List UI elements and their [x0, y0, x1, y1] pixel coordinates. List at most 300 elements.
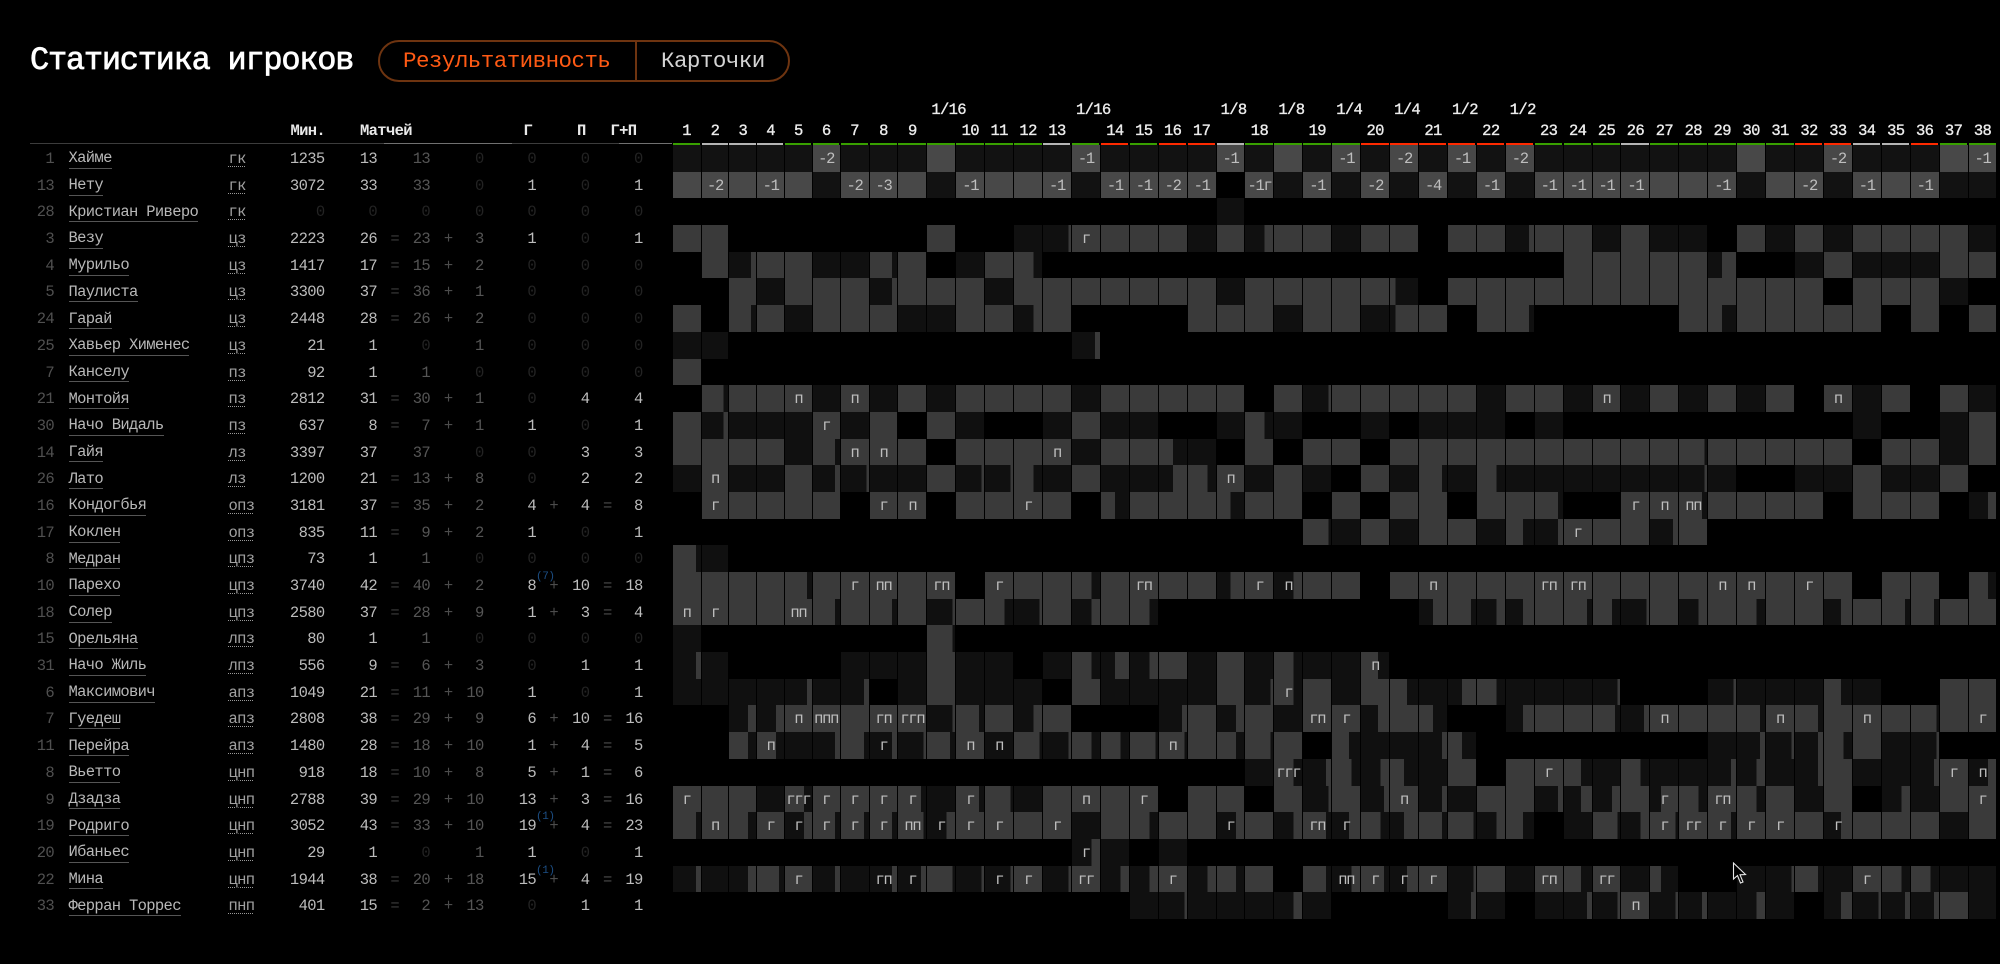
row: Мина: + — [549, 871, 558, 889]
row: Максимович: Максимович — [68, 683, 155, 701]
heatmap row: Парехо: гп — [1541, 577, 1557, 595]
heatmap row: Родриго: г — [937, 817, 945, 835]
row: Максимович: апз — [228, 684, 254, 702]
heatmap row: Гуедеш: п — [1863, 710, 1871, 728]
row: Коклен: = — [390, 524, 399, 542]
heatmap row: Хайме: -2 — [1830, 150, 1846, 168]
row: Коклен: 2 — [475, 524, 484, 542]
row: Максимович: = — [390, 684, 399, 702]
row: Везу — [45, 229, 643, 249]
match numbers: 11 — [990, 122, 1008, 140]
row: Кондогбья: 4 — [527, 497, 536, 515]
heatmap row: Ибаньес: г — [1082, 844, 1090, 862]
row: Ферран Торрес: 33 — [37, 897, 54, 915]
row: Солер: 9 — [475, 604, 484, 622]
row: Мурильо: 0 — [634, 257, 643, 275]
row: Дзадза: 10 — [466, 790, 484, 808]
row: Парехо: цпз — [228, 577, 254, 595]
row: Парехо — [37, 571, 643, 596]
heatmap row: Хайме — [673, 145, 1996, 172]
heatmap row: Лато — [673, 465, 1997, 492]
row: Лато: + — [444, 470, 453, 488]
row: Начо Жиль: Начо Жиль — [68, 656, 146, 674]
heatmap row: Гарай — [673, 305, 1997, 332]
row: Родриго: 3052 — [290, 817, 324, 835]
row: Везу: 23 — [413, 230, 430, 248]
row: Родриго: 43 — [360, 817, 377, 835]
row: Мурильо: 17 — [360, 257, 377, 275]
heatmap row: Гуедеш — [673, 705, 1997, 732]
row: Монтойя: 31 — [360, 390, 377, 408]
row: Хайме: гк — [228, 150, 246, 168]
match numbers: 25 — [1598, 122, 1615, 140]
row: Везу: 1 — [634, 230, 643, 248]
row: Мурильо: = — [390, 257, 399, 275]
heatmap row: Хавьер Хименес — [673, 332, 1997, 358]
row: Медран: 1 — [421, 550, 430, 568]
heatmap row: Нету: -4 — [1425, 177, 1441, 195]
heatmap row: Гуедеш: гп — [875, 710, 891, 728]
row: Перейра: 1 — [527, 737, 536, 755]
match numbers: 37 — [1945, 122, 1962, 140]
row: Гайя: 37 — [413, 444, 430, 462]
heatmap row: Дзадза: г — [1978, 790, 1986, 808]
heatmap row: Вьетто: п — [1978, 764, 1986, 782]
heatmap row: Хайме: -2 — [818, 150, 834, 168]
heatmap row: Родриго: пп — [904, 817, 920, 835]
row: Лато: 2 — [581, 470, 589, 488]
cup round labels: 1/4 — [1394, 101, 1420, 119]
row: Лато: 21 — [360, 470, 377, 488]
row: Гайя: 0 — [475, 444, 484, 462]
row: Парехо: = — [390, 577, 399, 595]
row: Лато — [37, 470, 643, 489]
row: Перейра: 28 — [360, 737, 377, 755]
row: Монтойя — [37, 390, 643, 409]
row: Начо Видаль: пз — [228, 417, 246, 435]
row: Вьетто: = — [603, 764, 612, 782]
row: Гуедеш: 38 — [360, 710, 377, 728]
row: Родриго: 4 — [581, 817, 589, 835]
row: Перейра — [37, 737, 643, 756]
heatmap row: Дзадза: г — [1660, 790, 1668, 808]
text: Мин. — [290, 122, 325, 140]
heatmap row: Дзадза: гп — [1714, 790, 1730, 808]
row: Парехо: 10 — [37, 577, 54, 595]
row: Максимович: 21 — [360, 684, 377, 702]
row: Дзадза: 2788 — [290, 790, 324, 808]
row: Орельяна: 0 — [634, 630, 643, 648]
row: Начо Жиль: 6 — [421, 657, 430, 675]
heatmap row: Кристиан Риверо — [1217, 198, 1244, 225]
row: Мурильо: 0 — [581, 257, 589, 275]
row: Гарай: = — [390, 310, 399, 328]
row: Медран: 0 — [581, 550, 589, 568]
heatmap row: Нету: -1 — [1541, 177, 1557, 195]
row: Монтойя: 30 — [413, 390, 430, 408]
row: Медран: 73 — [307, 550, 324, 568]
row: Гарай: 0 — [527, 310, 536, 328]
row: Начо Видаль: 0 — [581, 417, 589, 435]
match numbers: 4 — [766, 122, 775, 140]
row: Родриго: 19 — [37, 817, 54, 835]
row: Ибаньес: Ибаньес — [68, 843, 129, 861]
heatmap row: Ферран Торрес — [673, 892, 1997, 919]
row: Ибаньес: 0 — [421, 844, 430, 862]
row: Паулиста: 0 — [527, 283, 536, 301]
heatmap row: Мина: гп — [1541, 871, 1557, 889]
row: Дзадза: + — [444, 790, 453, 808]
row: Мина — [37, 865, 643, 889]
row: Нету: гк — [228, 177, 246, 195]
heatmap row: Нету: -2 — [847, 177, 863, 195]
row: Гарай: 2448 — [290, 310, 324, 328]
row: Солер: 4 — [634, 604, 643, 622]
row: Хавьер Хименес: 1 — [368, 337, 377, 355]
match numbers: 2 — [711, 122, 719, 140]
row: Коклен: 1 — [634, 524, 643, 542]
row: Перейра: 5 — [634, 737, 643, 755]
heatmap row: Перейра: г — [879, 737, 887, 755]
row: Орельяна: 15 — [37, 630, 54, 648]
row: Монтойя: + — [444, 390, 453, 408]
player statistics table — [37, 149, 643, 916]
heatmap row: Ферран Торрес: п — [1631, 897, 1639, 915]
match numbers: 14 — [1106, 122, 1123, 140]
row: Солер: = — [603, 604, 612, 622]
heatmap row: Перейра: п — [966, 737, 974, 755]
row: Гарай: 24 — [37, 310, 54, 328]
row: Канселу: Канселу — [68, 363, 129, 381]
heatmap row: Монтойя: п — [1602, 390, 1611, 408]
heatmap row: Дзадза: п — [1400, 790, 1408, 808]
heatmap row: Дзадза: г — [908, 790, 916, 808]
heatmap row: Солер: г — [711, 604, 719, 622]
row: Начо Видаль: 1 — [634, 417, 643, 435]
row: Хавьер Хименес: 25 — [37, 337, 54, 355]
row: Канселу: 0 — [581, 364, 589, 382]
cup round labels: 1/4 — [1336, 101, 1362, 119]
heatmap row: Лато: п — [1227, 470, 1235, 488]
row: Паулиста: 36 — [413, 283, 430, 301]
row: Нету: 3072 — [290, 177, 324, 195]
row: Кондогбья: = — [603, 497, 612, 515]
row: Кристиан Риверо: 0 — [581, 203, 589, 221]
heatmap row: Вьетто: г — [1950, 764, 1958, 782]
heatmap row: Парехо: гп — [1570, 577, 1586, 595]
row: Начо Видаль: 1 — [527, 417, 536, 435]
heatmap row: Нету: -2 — [1367, 177, 1383, 195]
row: Перейра: = — [390, 737, 399, 755]
row: Ферран Торрес: Ферран Торрес — [68, 897, 181, 915]
heatmap row: Нету: -2 — [1801, 177, 1817, 195]
match numbers: 18 — [1251, 122, 1268, 140]
row: Ферран Торрес: 401 — [299, 897, 324, 915]
row: Гуедеш — [45, 710, 643, 729]
row: Хайме: 0 — [581, 150, 589, 168]
row: Гайя: 3397 — [290, 444, 324, 462]
row: Начо Жиль: 1 — [634, 657, 643, 675]
row: Ферран Торрес: 1 — [581, 897, 589, 915]
row: Ибаньес: 1 — [527, 844, 536, 862]
heatmap row: Нету: -1 — [1714, 177, 1730, 195]
row: Мина: Мина — [68, 870, 103, 888]
row: Дзадза: 13 — [519, 790, 536, 808]
heatmap row: Мина: г — [1169, 871, 1177, 889]
row: Родриго: 10 — [466, 817, 484, 835]
row: Гуедеш: 7 — [45, 710, 54, 728]
row: Орельяна: 1 — [368, 630, 377, 648]
row: Хавьер Хименес: 1 — [475, 337, 484, 355]
heatmap row: Мина: г — [995, 871, 1003, 889]
row: Солер: 1 — [527, 604, 536, 622]
heatmap row: Родриго: п — [711, 817, 719, 835]
row: Максимович: + — [444, 684, 453, 702]
row: Хавьер Хименес: 0 — [634, 337, 643, 355]
heatmap row: Гуедеш: п — [1660, 710, 1668, 728]
row: Родриго: = — [603, 817, 612, 835]
heatmap row: Парехо: гп — [933, 577, 949, 595]
row: Лато: 13 — [413, 470, 430, 488]
row: Хавьер Хименес — [37, 336, 643, 356]
row: Гуедеш: 16 — [625, 710, 643, 728]
row: Мурильо: цз — [228, 257, 246, 275]
row: Везу: 26 — [360, 230, 377, 248]
match numbers: 5 — [794, 122, 803, 140]
row: Мина: = — [390, 871, 399, 889]
row: Кондогбья: 35 — [413, 497, 430, 515]
heatmap row: Мина: гг — [1078, 871, 1094, 889]
heatmap row: Гайя — [673, 439, 1997, 465]
row: Медран — [45, 550, 643, 569]
heatmap row: Хайме: -1 — [1223, 150, 1239, 168]
heatmap row: Перейра: п — [995, 737, 1003, 755]
match numbers: 20 — [1366, 122, 1384, 140]
row: Вьетто: 8 — [45, 764, 54, 782]
row: Начо Жиль: 3 — [475, 657, 484, 675]
heatmap row: Парехо: г — [1805, 577, 1813, 595]
row: Начо Жиль: 31 — [37, 657, 54, 675]
heatmap row: Везу — [673, 225, 1996, 252]
heatmap row: Хайме: -1 — [1454, 150, 1470, 168]
heatmap row: Кондогбья: п — [908, 497, 916, 515]
row: Перейра: 18 — [413, 737, 430, 755]
row: Солер — [37, 603, 643, 623]
row: Вьетто: 5 — [527, 764, 536, 782]
heatmap row: Мина: г — [794, 871, 802, 889]
row: Везу: = — [390, 230, 399, 248]
row: Коклен: опз — [228, 524, 254, 542]
row: Орельяна: лпз — [228, 630, 254, 648]
heatmap row: Хайме: -1 — [1078, 150, 1094, 168]
row: Кондогбья: Кондогбья — [68, 496, 146, 514]
row: Дзадза: 39 — [360, 790, 377, 808]
row: Хайме: 0 — [527, 150, 536, 168]
row: Мина: 18 — [466, 871, 484, 889]
icon: mouse cursor — [1732, 862, 1747, 886]
row: Ферран Торрес: 15 — [360, 897, 377, 915]
row: Гарай: + — [444, 310, 453, 328]
row: Кондогбья: 16 — [37, 497, 54, 515]
heatmap row: Дзадза: г — [822, 790, 830, 808]
heatmap row: Гуедеш: гп — [1309, 710, 1325, 728]
heatmap row: Парехо: г — [851, 577, 859, 595]
heatmap row: Нету: -1 — [1309, 177, 1325, 195]
row: Коклен: 9 — [421, 524, 430, 542]
heatmap row: Парехо — [673, 572, 1997, 599]
row: Мина: 22 — [37, 871, 54, 889]
row: Вьетто: + — [549, 764, 558, 782]
heatmap row: Нету: -1 — [1598, 177, 1615, 195]
heatmap row: Гуедеш: п — [1776, 710, 1784, 728]
row: Солер: 2580 — [290, 604, 324, 622]
row: Солер: Солер — [68, 603, 112, 621]
row: Ферран Торрес: 1 — [634, 897, 643, 915]
row: Монтойя: 4 — [634, 390, 643, 408]
row: Хайме: 0 — [475, 150, 484, 168]
row: Гуедеш: 29 — [413, 710, 430, 728]
row: Кондогбья: 4 — [581, 497, 589, 515]
row: Монтойя: пз — [228, 390, 246, 408]
row: Орельяна: 80 — [307, 630, 324, 648]
row: Перейра: + — [444, 737, 453, 755]
row: Мурильо: + — [444, 257, 453, 275]
row: Хавьер Хименес: 0 — [421, 337, 430, 355]
row: Орельяна — [37, 630, 643, 649]
row: Хайме: 1 — [45, 150, 54, 168]
row: Медран: Медран — [68, 550, 120, 568]
row: Ферран Торрес: 2 — [421, 897, 430, 915]
row: Перейра: = — [603, 737, 612, 755]
row: Солер: = — [390, 604, 399, 622]
row: Монтойя: 4 — [581, 390, 589, 408]
match numbers: 6 — [822, 122, 830, 140]
row: Начо Видаль: 30 — [37, 417, 54, 435]
row: Родриго: 33 — [413, 817, 430, 835]
row: Начо Жиль: 556 — [299, 657, 324, 675]
heatmap row: Монтойя: п — [1834, 390, 1842, 408]
match numbers: 7 — [850, 122, 859, 140]
row: Паулиста: 37 — [360, 283, 377, 301]
row: Коклен: 0 — [581, 524, 589, 542]
row: Нету: 0 — [581, 177, 589, 195]
heatmap row: Дзадза: г — [966, 790, 974, 808]
row: Солер: 18 — [37, 604, 54, 622]
row: Вьетто: + — [444, 764, 453, 782]
row: Родриго: + — [444, 817, 453, 835]
row: Ибаньес: 1 — [368, 844, 377, 862]
row: Максимович: 11 — [413, 684, 430, 702]
row: Паулиста: 0 — [581, 283, 589, 301]
row: Нету: 1 — [527, 177, 536, 195]
heatmap row: Кондогбья: пп — [1685, 497, 1701, 515]
heatmap row: Нету: -1 — [1917, 177, 1933, 195]
match numbers: 30 — [1742, 122, 1760, 140]
row: Гайя: 3 — [634, 444, 643, 462]
row: Кондогбья — [37, 496, 643, 516]
row: Вьетто: 918 — [299, 764, 324, 782]
row: Гарай: 28 — [360, 310, 377, 328]
row: Родриго: Родриго — [68, 817, 129, 835]
row: Везу: 3 — [45, 230, 54, 248]
row: Мина: 20 — [413, 871, 430, 889]
text: Г — [524, 122, 532, 140]
heatmap row: Начо Жиль: п — [1371, 657, 1379, 675]
heatmap row: Родриго: г — [1747, 817, 1755, 835]
heatmap row: Родриго: г — [794, 817, 802, 835]
row: Паулиста: цз — [228, 283, 246, 301]
heatmap row: Кондогбья: г — [711, 497, 719, 515]
row: Гуедеш: апз — [228, 710, 254, 728]
heatmap row: Коклен — [673, 519, 1997, 545]
row: Паулиста: = — [390, 283, 399, 301]
heatmap row: Перейра — [673, 732, 1997, 759]
cup round labels — [931, 101, 1536, 119]
row: Перейра: 4 — [581, 737, 589, 755]
match numbers: 33 — [1829, 122, 1847, 140]
cup round labels: 1/2 — [1452, 101, 1478, 119]
match result colour bars — [673, 143, 1996, 145]
row: Мурильо: 1417 — [290, 257, 324, 275]
row: Орельяна: 1 — [421, 630, 430, 648]
heatmap row: Родриго: г — [1227, 817, 1235, 835]
row: Канселу: 1 — [368, 364, 377, 382]
cup round labels: 1/8 — [1278, 101, 1304, 119]
heatmap row: Нету: -1 — [1859, 177, 1875, 195]
match numbers: 31 — [1771, 122, 1789, 140]
row: Парехо: 3740 — [290, 577, 324, 595]
heatmap row: Кондогбья — [673, 492, 1997, 519]
row: Максимович: 1 — [634, 684, 643, 702]
heatmap row: Мина: г — [1863, 871, 1871, 889]
row: Солер: + — [549, 604, 558, 622]
row: Ибаньес: 29 — [307, 844, 324, 862]
heatmap row: Вьетто: ггг — [1276, 764, 1300, 782]
row: Солер: 28 — [413, 604, 430, 622]
row: Кристиан Риверо: 0 — [634, 203, 643, 221]
row: Медран: 0 — [475, 550, 484, 568]
row: Хайме: 0 — [634, 150, 643, 168]
row: Мина: 15 — [519, 871, 536, 889]
row: Максимович: 6 — [45, 684, 54, 702]
heatmap row: Лато: п — [711, 470, 719, 488]
heatmap row: Гуедеш: ггп — [900, 710, 924, 728]
heatmap row: Дзадза: г — [879, 790, 887, 808]
row: Лато: 26 — [37, 470, 54, 488]
row: Мина: (1) — [536, 865, 555, 877]
row: Начо Жиль: 9 — [368, 657, 377, 675]
heatmap row: Монтойя: п — [851, 390, 859, 408]
row: Канселу: 1 — [421, 364, 430, 382]
heatmap row: Парехо: пп — [875, 577, 891, 595]
heatmap row: Нету: -2 — [707, 177, 723, 195]
row: Максимович: 1049 — [290, 684, 324, 702]
row: Вьетто: Вьетто — [68, 763, 120, 781]
heatmap row: Солер: п — [683, 604, 691, 622]
row: Лато: 8 — [475, 470, 484, 488]
table column headers — [290, 122, 636, 140]
heatmap row: Гуедеш: г — [1342, 710, 1350, 728]
row: Кондогбья: + — [444, 497, 453, 515]
row: Медран: цпз — [228, 550, 254, 568]
row: Мурильо: 2 — [475, 257, 484, 275]
row: Ибаньес — [37, 843, 643, 863]
row: Гуедеш: 9 — [475, 710, 484, 728]
row: Кондогбья: 2 — [475, 497, 484, 515]
row: Монтойя: 0 — [527, 390, 536, 408]
heatmap row: Парехо: г — [1255, 577, 1263, 595]
heatmap row: Нету: -1 — [962, 177, 978, 195]
